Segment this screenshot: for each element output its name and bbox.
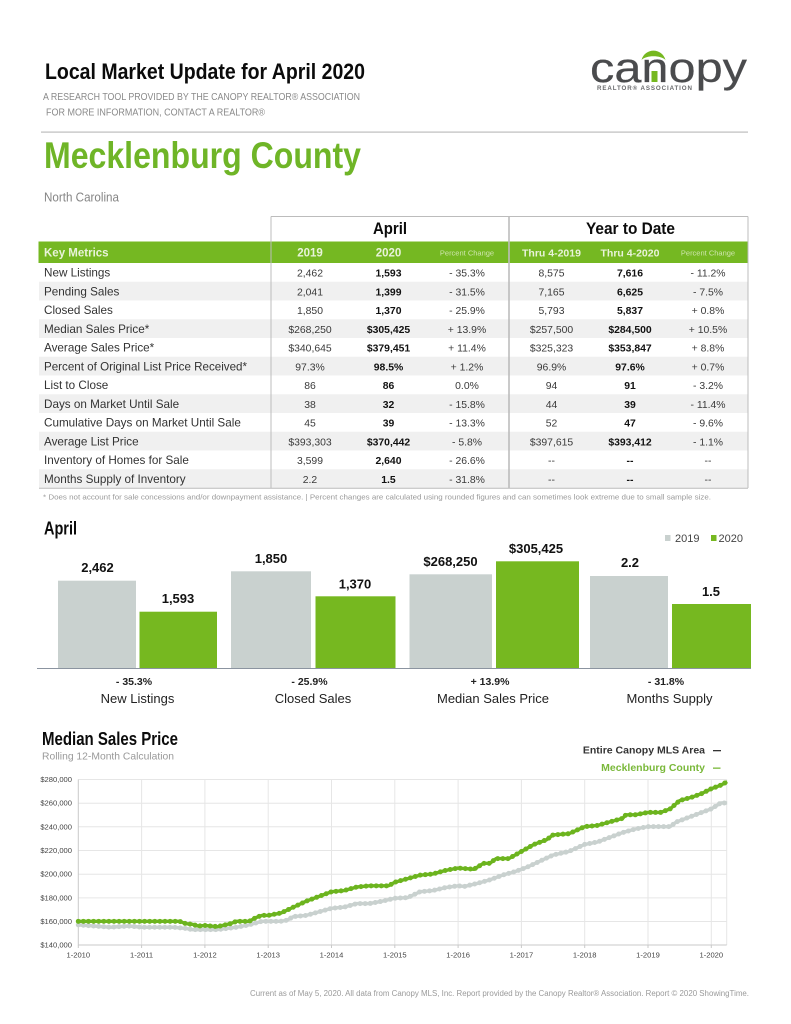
panel: April bar chart <box>37 518 751 706</box>
row: Percent of Original List Price Received: + 1.2% <box>451 362 483 373</box>
row: Average List Price: Average List Price <box>44 435 139 448</box>
y axis labels: $180,000 <box>40 893 72 902</box>
row: Average Sales Price: $353,847 <box>608 344 652 354</box>
group: Months Supply: Months Supply <box>626 691 713 706</box>
row: Inventory of Homes for Sale: - 26.6% <box>449 456 485 467</box>
row: Inventory of Homes for Sale: 3,599 <box>297 456 323 467</box>
bar chart legend: 2020 <box>718 533 743 545</box>
x axis labels: 1-2010 <box>66 950 90 960</box>
group: Median Sales Price <box>410 541 579 706</box>
x axis labels <box>66 950 723 960</box>
row: Pending Sales: 7,165 <box>538 287 565 298</box>
row: Closed Sales: Closed Sales <box>44 304 113 317</box>
group: Months Supply: - 31.8% <box>648 676 685 688</box>
row: Months Supply of Inventory: Months Supply of Inventory <box>44 473 186 486</box>
row: Months Supply of Inventory <box>44 473 711 486</box>
row: Percent of Original List Price Received: 98.5% <box>374 362 403 373</box>
row: New Listings <box>44 266 726 280</box>
column headers: 2019 <box>297 248 323 260</box>
y axis labels: $140,000 <box>40 940 72 950</box>
subtitle line 1: A RESEARCH TOOL PROVIDED BY THE CANOPY REALTOR® ASSOCIATION <box>43 91 360 103</box>
bar chart heading: April <box>44 518 77 538</box>
row: Closed Sales: - 25.9% <box>449 306 485 317</box>
group: New Listings: 1,593 <box>162 591 194 606</box>
logo: Canopy Realtor Association <box>590 44 747 92</box>
group: New Listings: - 35.3% <box>116 676 153 688</box>
x axis labels: 1-2017 <box>510 950 533 960</box>
row: Average List Price <box>44 435 723 448</box>
row: Average Sales Price: $379,451 <box>367 344 410 354</box>
row: Average Sales Price: $325,323 <box>530 344 573 354</box>
logo roof arc <box>642 51 666 60</box>
row: Percent of Original List Price Received <box>44 360 724 373</box>
row: Median Sales Price: + 10.5% <box>689 325 727 336</box>
row: Days on Market Until Sale: 39 <box>624 400 636 411</box>
line chart subheading: Rolling 12-Month Calculation <box>42 750 174 762</box>
row: Months Supply of Inventory: -- <box>548 475 555 486</box>
column headers: 2020 <box>376 248 401 260</box>
row: Cumulative Days on Market Until Sale: Cumulative Days on Market Until Sale <box>44 416 241 430</box>
row: List to Close: - 3.2% <box>693 381 723 392</box>
bar chart legend <box>665 533 743 545</box>
line chart legend: Mecklenburg County <box>601 762 705 774</box>
row: Average List Price: - 1.1% <box>693 437 723 448</box>
row: Inventory of Homes for Sale <box>44 454 711 467</box>
x axis labels: 1-2020 <box>699 950 723 960</box>
column headers: Thru 4-2020 <box>601 248 660 260</box>
group: Closed Sales: 1,850 <box>255 551 287 566</box>
group: Closed Sales: Closed Sales <box>275 691 352 706</box>
row: Months Supply of Inventory: - 31.8% <box>449 475 485 486</box>
y axis labels: $240,000 <box>40 822 72 831</box>
row: Average Sales Price <box>44 342 724 354</box>
column headers: Percent Change <box>681 248 735 258</box>
group: Median Sales Price: Median Sales Price <box>437 691 549 706</box>
group: Closed Sales: 1,370 <box>339 576 371 592</box>
row: Months Supply of Inventory: 1.5 <box>381 475 396 486</box>
row: Pending Sales: 2,041 <box>297 287 323 298</box>
row: Months Supply of Inventory: -- <box>627 475 634 486</box>
row: Inventory of Homes for Sale: Inventory of Homes for Sale <box>44 454 189 467</box>
row: Closed Sales <box>44 304 724 317</box>
y axis labels: $160,000 <box>40 917 72 926</box>
x axis labels: 1-2016 <box>446 950 470 960</box>
line chart legend <box>583 744 721 774</box>
group: Months Supply <box>590 555 751 706</box>
row: List to Close <box>44 379 723 392</box>
panel: key metrics table <box>38 216 748 488</box>
row: List to Close: 0.0% <box>455 381 479 392</box>
group: New Listings: New Listings <box>101 691 175 706</box>
y axis labels: $220,000 <box>40 846 72 855</box>
y axis labels: $200,000 <box>40 870 72 879</box>
row: Closed Sales: 5,793 <box>538 306 565 317</box>
row: Cumulative Days on Market Until Sale: 47 <box>624 418 636 430</box>
chart grid <box>78 780 727 948</box>
row: Closed Sales: 1,850 <box>297 306 323 317</box>
x axis labels: 1-2012 <box>193 950 217 960</box>
row: Percent of Original List Price Received: + 0.7% <box>692 362 724 373</box>
y axis labels <box>40 775 72 950</box>
logo association line: REALTOR® ASSOCIATION <box>597 85 693 92</box>
row: Average Sales Price: + 8.8% <box>692 344 724 354</box>
group: Months Supply: 1.5 <box>702 584 720 599</box>
row: New Listings: 8,575 <box>538 268 565 280</box>
row: New Listings: - 35.3% <box>449 268 485 280</box>
row: Days on Market Until Sale: - 15.8% <box>449 400 485 411</box>
header: report title and source <box>43 59 365 118</box>
column headers <box>44 248 735 260</box>
row: Months Supply of Inventory: -- <box>705 475 711 486</box>
group: Months Supply: 2.2 <box>621 555 639 570</box>
x axis labels: 1-2014 <box>320 950 343 960</box>
row: Days on Market Until Sale <box>44 398 726 411</box>
group: New Listings <box>58 560 217 706</box>
row: Cumulative Days on Market Until Sale: - 13.3% <box>449 418 485 430</box>
group: Median Sales Price: + 13.9% <box>471 676 510 688</box>
row: Closed Sales: 1,370 <box>375 306 402 317</box>
x axis labels: 1-2019 <box>636 950 660 960</box>
row: Average Sales Price: Average Sales Price* <box>44 342 155 354</box>
row: Percent of Original List Price Received: 96.9% <box>537 362 566 373</box>
column headers: Thru 4-2019 <box>522 248 581 260</box>
row: Cumulative Days on Market Until Sale: 52 <box>546 418 557 430</box>
row: Cumulative Days on Market Until Sale <box>44 416 723 430</box>
row: Average List Price: $370,442 <box>367 437 410 448</box>
logo door <box>652 71 658 82</box>
row: Inventory of Homes for Sale: 2,640 <box>375 456 402 467</box>
county heading: Mecklenburg County <box>44 135 361 176</box>
row: Median Sales Price <box>44 323 727 336</box>
logo wordmark: canopy <box>590 44 747 91</box>
row: Percent of Original List Price Received: 97.6% <box>615 362 645 373</box>
x axis labels: 1-2013 <box>256 950 280 960</box>
row: New Listings: 2,462 <box>297 268 323 280</box>
line chart legend: Entire Canopy MLS Area <box>583 744 705 756</box>
group: Closed Sales <box>231 551 396 706</box>
title: Local Market Update for April 2020 <box>45 59 365 84</box>
line: Entire Canopy MLS Area <box>78 803 727 930</box>
line: Mecklenburg County <box>78 782 727 927</box>
row: New Listings: New Listings <box>44 266 110 280</box>
table footnote: * Does not account for sale concessions and/or downpayment assistance. | Percent changes are calculated using rounded figures and can sometimes look extreme due to small sample size. <box>43 492 711 502</box>
row: Pending Sales <box>44 285 723 298</box>
column headers: Key Metrics <box>44 248 109 260</box>
row: List to Close: List to Close <box>44 379 108 392</box>
group: Closed Sales: - 25.9% <box>291 676 328 688</box>
row: Pending Sales: - 31.5% <box>449 287 485 298</box>
row: Median Sales Price: Median Sales Price* <box>44 323 150 336</box>
row: Median Sales Price: + 13.9% <box>448 325 486 336</box>
group heading: Year to Date: Year to Date <box>586 219 675 238</box>
row: Median Sales Price: $305,425 <box>367 325 410 336</box>
row: Days on Market Until Sale: - 11.4% <box>690 400 726 411</box>
group heading: April: April <box>373 219 407 238</box>
line chart heading: Median Sales Price <box>42 729 178 749</box>
row: Average List Price: $393,303 <box>288 437 332 448</box>
row: Days on Market Until Sale: 44 <box>546 400 557 411</box>
group: New Listings: 2,462 <box>81 560 114 575</box>
row: Pending Sales: - 7.5% <box>693 287 723 298</box>
row: List to Close: 91 <box>624 381 636 392</box>
row: Days on Market Until Sale: Days on Market Until Sale <box>44 398 179 411</box>
row: Percent of Original List Price Received: Percent of Original List Price Received* <box>44 360 247 373</box>
group: Median Sales Price: $268,250 <box>423 554 478 569</box>
row: Days on Market Until Sale: 38 <box>304 400 316 411</box>
subtitle line 2: FOR MORE INFORMATION, CONTACT A REALTOR® <box>46 106 265 118</box>
table header band <box>38 242 748 263</box>
row: Inventory of Homes for Sale: -- <box>705 456 711 467</box>
row: Inventory of Homes for Sale: -- <box>548 456 555 467</box>
column headers: Percent Change <box>440 248 494 258</box>
row: Pending Sales: 1,399 <box>375 287 402 298</box>
row: List to Close: 86 <box>304 381 316 392</box>
row: Median Sales Price: $257,500 <box>530 325 573 336</box>
x axis labels: 1-2018 <box>573 950 597 960</box>
row: Median Sales Price: $284,500 <box>608 325 652 336</box>
row: New Listings: 1,593 <box>375 268 402 280</box>
row: List to Close: 86 <box>383 381 394 392</box>
row: New Listings: - 11.2% <box>690 268 726 280</box>
row: New Listings: 7,616 <box>617 268 643 280</box>
row: Inventory of Homes for Sale: -- <box>627 456 634 467</box>
row: Cumulative Days on Market Until Sale: - 9.6% <box>693 418 723 430</box>
y axis labels: $260,000 <box>40 799 72 808</box>
row: Average Sales Price: $340,645 <box>288 344 332 354</box>
row: Months Supply of Inventory: 2.2 <box>303 475 317 486</box>
row: Cumulative Days on Market Until Sale: 45 <box>304 418 316 430</box>
page footer note: Current as of May 5, 2020. All data from Canopy MLS, Inc. Report provided by the Canopy Realtor® Association. Report © 2020 ShowingTime. <box>250 989 749 998</box>
row: Pending Sales: Pending Sales <box>44 285 120 298</box>
panel: median sales price line chart <box>40 729 727 960</box>
row: Pending Sales: 6,625 <box>617 287 643 298</box>
row: Median Sales Price: $268,250 <box>288 325 332 336</box>
y axis labels: $280,000 <box>40 775 72 784</box>
row: Cumulative Days on Market Until Sale: 39 <box>383 418 394 430</box>
row: Days on Market Until Sale: 32 <box>383 400 394 411</box>
row: Closed Sales: + 0.8% <box>692 306 724 317</box>
row: Average Sales Price: + 11.4% <box>448 344 486 354</box>
row: Percent of Original List Price Received: 97.3% <box>295 362 325 373</box>
group: Median Sales Price: $305,425 <box>509 541 563 556</box>
row: Average List Price: - 5.8% <box>452 437 482 448</box>
bar chart legend: 2019 <box>675 533 699 545</box>
row: List to Close: 94 <box>546 381 557 392</box>
state label: North Carolina <box>44 190 120 204</box>
x axis labels: 1-2011 <box>130 950 153 960</box>
row: Average List Price: $393,412 <box>608 437 652 448</box>
table frame <box>39 216 748 488</box>
row: Closed Sales: 5,837 <box>617 306 643 317</box>
row: Average List Price: $397,615 <box>530 437 573 448</box>
x axis labels: 1-2015 <box>383 950 407 960</box>
table zebra rows <box>39 282 748 488</box>
